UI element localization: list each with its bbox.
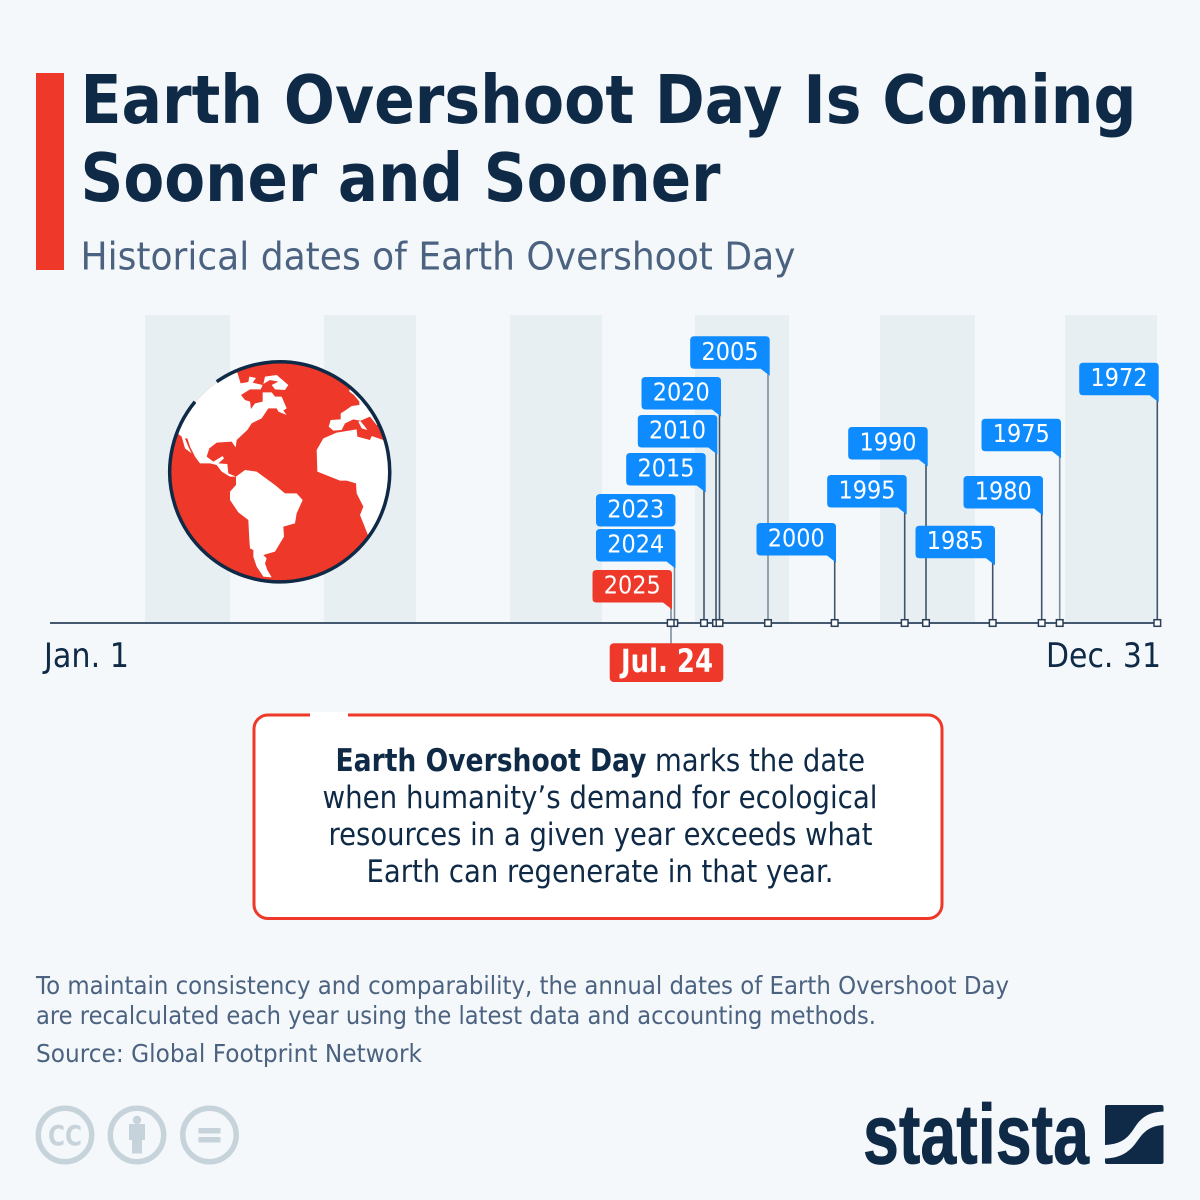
accent bar [36, 73, 64, 270]
flag: 2000 [756, 523, 836, 562]
flag: 2010: 2010 [649, 416, 706, 444]
timeline chart [42, 315, 1161, 682]
flag: 2025 [592, 570, 672, 610]
flag: 2015 [626, 453, 706, 492]
flag: 1985: 1985 [927, 526, 984, 555]
flag: 1975 [982, 419, 1061, 458]
flag: 1980 [964, 476, 1043, 516]
flag: 1995: 1995 [838, 476, 895, 504]
flag: 1985 [916, 526, 995, 565]
footnote: are recalculated each year using the latest data and accounting methods. [36, 1001, 876, 1030]
footnote: To maintain consistency and comparability, the annual dates of Earth Overshoot Day [35, 971, 1009, 1000]
callout [254, 712, 942, 918]
flag: 1972 [1079, 363, 1159, 402]
flag: 1975: 1975 [993, 419, 1050, 448]
icon: statista mark [1105, 1105, 1164, 1164]
source: Source: Global Footprint Network [36, 1039, 423, 1068]
title [80, 61, 1136, 217]
icon: creative commons: CC [48, 1119, 82, 1152]
date badge: Jul. 24: Jul. 24 [619, 642, 713, 680]
flag: 2000: 2000 [768, 524, 825, 552]
callout text: when humanity’s demand for ecological [322, 780, 878, 816]
footnote [35, 971, 1009, 1030]
flag: 1972: 1972 [1090, 363, 1147, 392]
axis label: Jan. 1: Jan. 1 [42, 636, 129, 676]
title: Sooner and Sooner [80, 139, 720, 217]
flag: 1980: 1980 [975, 476, 1032, 506]
flag: 2023: 2023 [607, 494, 664, 524]
callout text: Earth can regenerate in that year. [366, 854, 834, 890]
axis line [50, 622, 1157, 624]
flag: 2024 [596, 529, 676, 568]
icon: attribution [110, 1108, 164, 1162]
flag: 2025: 2025 [604, 570, 661, 600]
flag: 2024: 2024 [607, 530, 664, 558]
axis tick markers [667, 620, 1161, 626]
flag: 1990: 1990 [859, 428, 916, 456]
callout text: marks the date [655, 743, 865, 779]
flag: 2005: 2005 [701, 337, 758, 366]
callout text: resources in a given year exceeds what [328, 817, 872, 853]
statista logo: statista [863, 1088, 1090, 1182]
flag stems [671, 370, 1157, 645]
flag: 2005 [690, 336, 770, 376]
flag: 2015: 2015 [637, 454, 694, 482]
callout text: Earth Overshoot Day [336, 743, 646, 779]
icon: no derivatives [183, 1108, 236, 1162]
axis label: Dec. 31: Dec. 31 [1046, 636, 1161, 676]
icon: globe [163, 357, 403, 582]
flag: 2020: 2020 [653, 378, 710, 406]
icon: creative commons [38, 1108, 92, 1162]
flag: 2020 [642, 377, 721, 416]
flag: 1995 [827, 475, 907, 514]
subtitle: Historical dates of Earth Overshoot Day [80, 234, 796, 278]
callout text [322, 743, 878, 890]
flag: 2010 [638, 415, 717, 454]
flag: 1990 [848, 427, 928, 466]
